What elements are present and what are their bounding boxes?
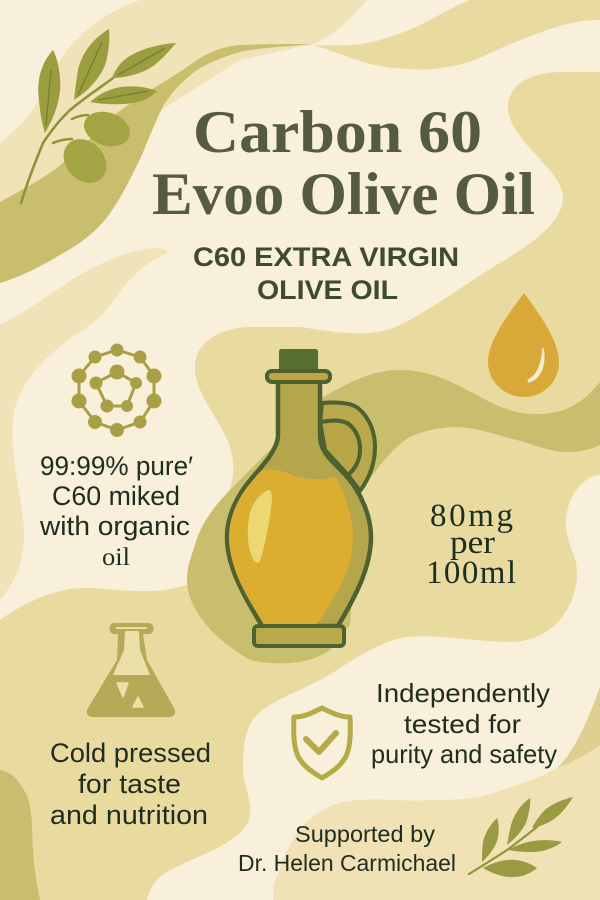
text: independently tested: purity and safety — [371, 739, 557, 769]
flask rim slit — [116, 627, 147, 629]
icon: olive oil bottle — [227, 349, 375, 646]
text: dosage: 100ml — [426, 555, 516, 591]
text: dosage — [426, 498, 516, 591]
branch stem — [21, 78, 113, 203]
oil highlight — [248, 490, 272, 563]
bottle cap — [279, 349, 318, 371]
bottle collar — [267, 371, 330, 382]
text: supported by: Dr. Helen Carmichael — [238, 850, 456, 876]
text: cold pressed: Cold pressed — [50, 738, 211, 768]
icon: C60 molecule — [72, 344, 162, 437]
text: independently tested — [371, 678, 557, 769]
flask bubbles — [117, 683, 143, 707]
subtitle: OLIVE OIL — [257, 275, 398, 305]
subtitle: C60 EXTRA VIRGIN — [193, 242, 459, 272]
icon: olive branch — [21, 29, 176, 203]
drop highlight — [528, 348, 544, 382]
text: purity: C60 miked — [52, 481, 180, 511]
text: independently tested: Independently — [376, 678, 550, 708]
text: purity: oil — [102, 544, 130, 571]
text: supported by — [238, 821, 456, 876]
text: cold pressed: for taste — [78, 769, 181, 799]
text: dosage: 80mg — [430, 498, 513, 534]
text: independently tested: tested for — [404, 709, 521, 739]
icon: flask — [87, 623, 175, 717]
icon: shield check — [294, 708, 350, 778]
handle opening — [320, 421, 360, 475]
bottle glass — [227, 381, 371, 626]
subtitle — [193, 242, 459, 305]
flask window — [113, 631, 150, 675]
text: purity: 99:99% pure′ — [40, 451, 193, 481]
title: Evoo Olive Oil — [152, 161, 535, 227]
oil fill — [229, 470, 353, 624]
text: cold pressed: and nutrition — [50, 800, 208, 830]
text: purity: with organic — [39, 511, 190, 541]
leaves — [38, 29, 176, 133]
text: purity — [39, 451, 193, 571]
bottle handle — [320, 403, 375, 491]
check mark — [306, 733, 336, 752]
text: cold pressed — [50, 738, 211, 830]
title — [152, 99, 535, 227]
title: Carbon 60 — [193, 99, 482, 165]
text: supported by: Supported by — [295, 821, 436, 847]
icon: oil drop — [488, 293, 559, 397]
bottle base — [254, 626, 344, 646]
text: dosage: per — [450, 525, 495, 561]
olives — [55, 106, 134, 192]
icon: bottom olive sprig — [469, 797, 573, 877]
